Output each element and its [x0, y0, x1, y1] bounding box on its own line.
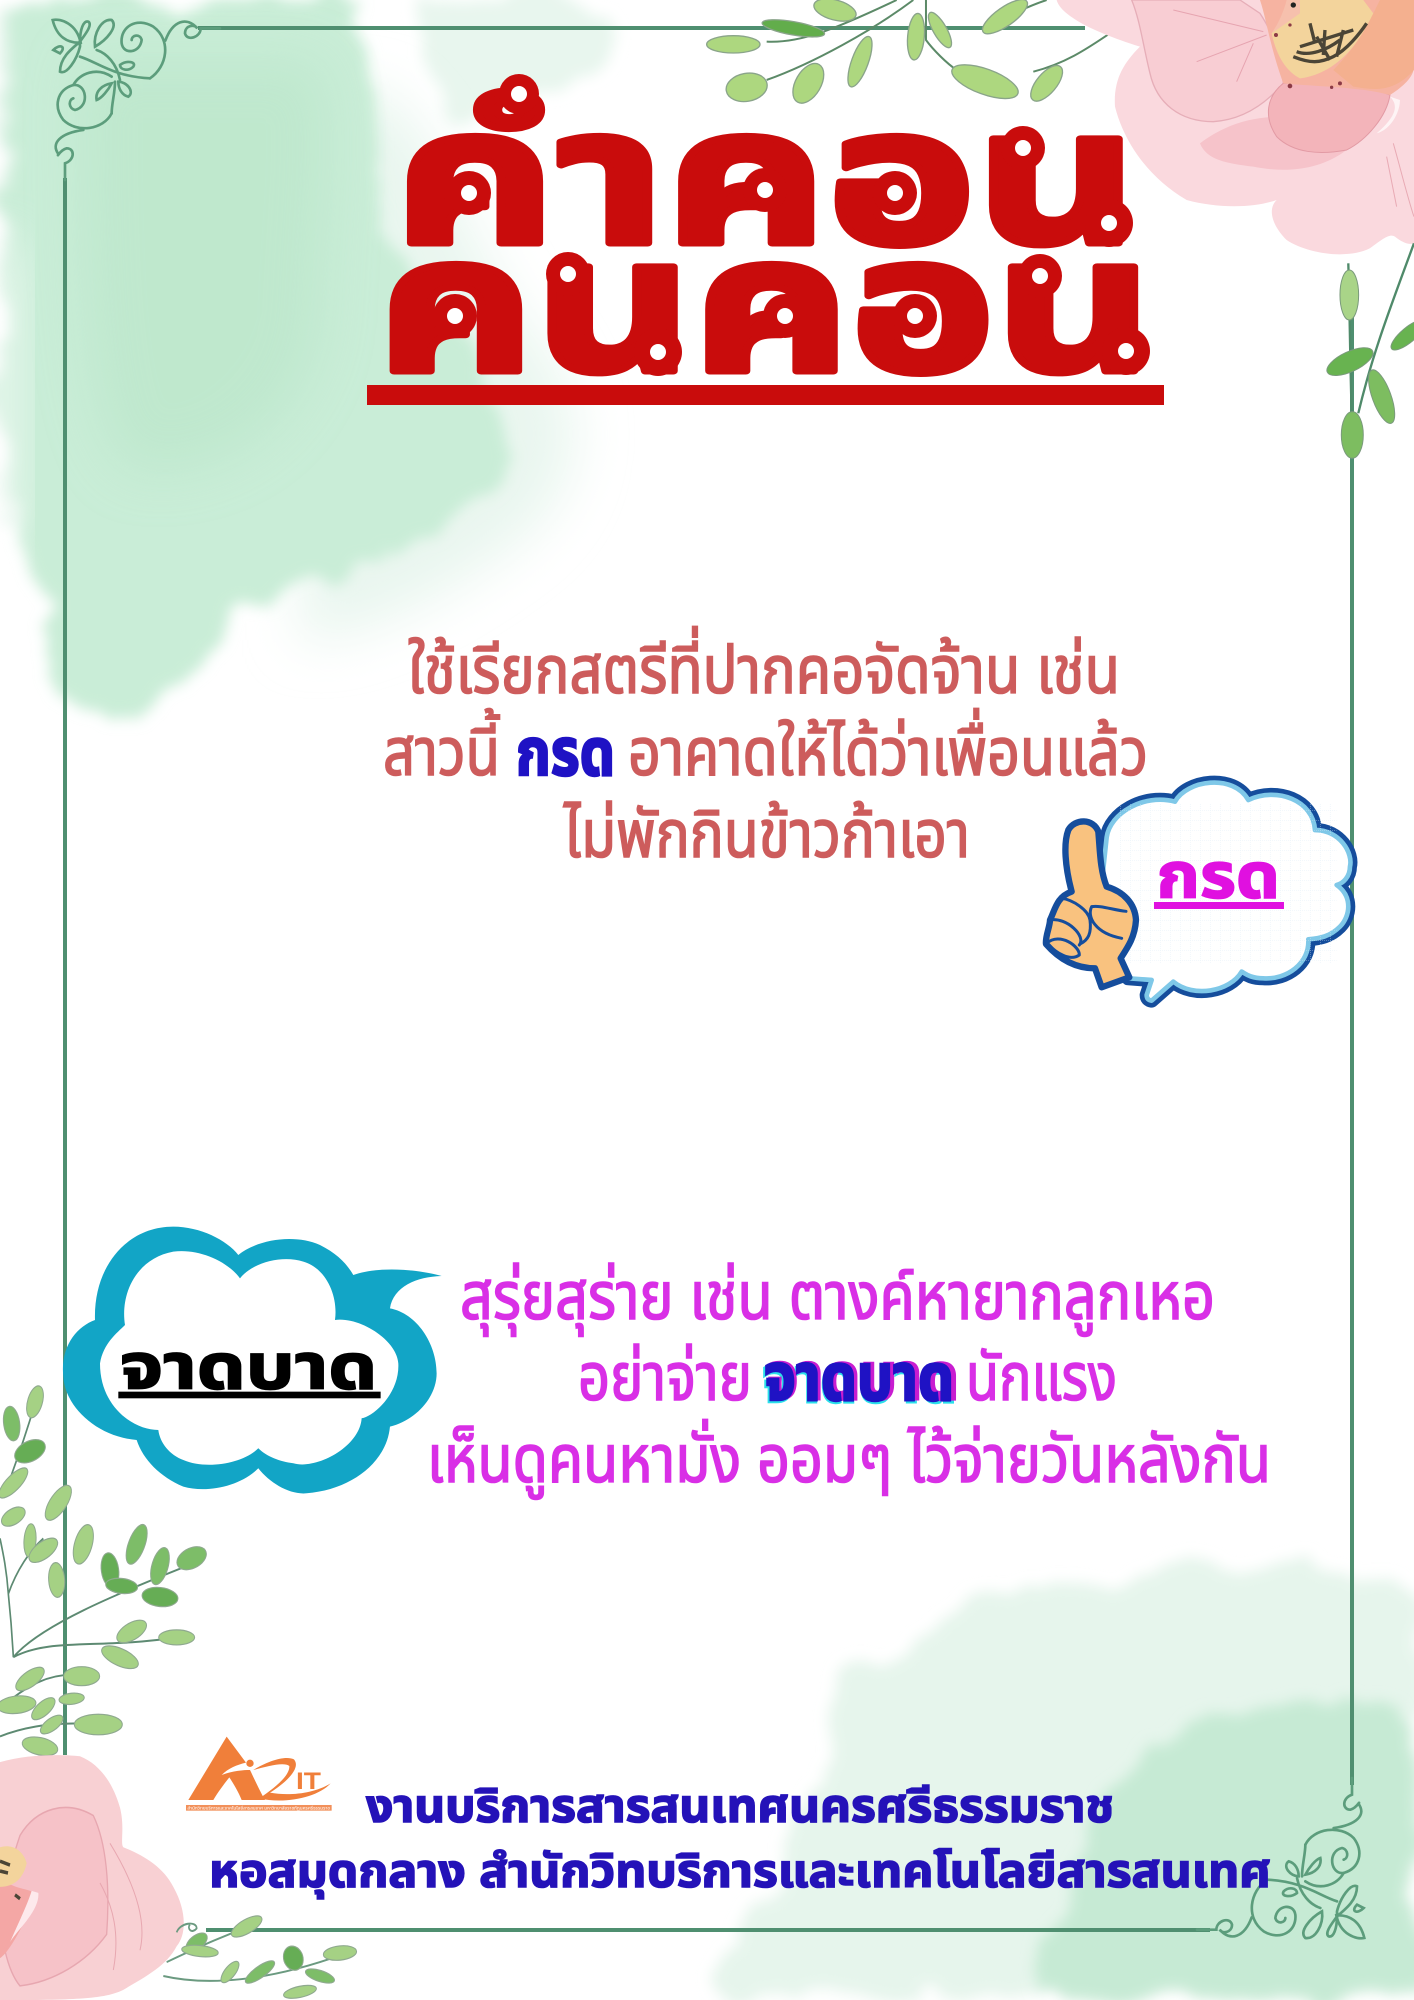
callout: กรด cloud with thumbs-up hand [1046, 783, 1350, 1001]
title underline [367, 385, 1164, 405]
background: green watercolor wash bottom-right [720, 1561, 1414, 1995]
logo: A2IT: สำนักวิทยบริการและเทคโนโลยีสารสนเทศ มหาวิทยาลัยราชภัฏนครศรีธรรมราช [187, 1804, 331, 1810]
ornament: bottom-right corner [1197, 1778, 1364, 1938]
highlighted word จาดบาด: จาดบาด [764, 1340, 954, 1414]
callout: จาดบาด cloud [63, 1227, 442, 1493]
text block: definition of กรด [383, 626, 1148, 871]
footer line 1: งานบริการสารสนเทศนครศรีธรรมราช [366, 1780, 1114, 1832]
cloud [1100, 783, 1350, 1001]
line 2 end: อาคาดให้ได้ว่าเพื่อนแล้ว [628, 708, 1148, 789]
line 1: ใช้เรียกสตรีที่ปากคอจัดจ้าน เช่น [408, 626, 1120, 707]
line 2 end: นักแรง [966, 1340, 1117, 1414]
footer text [209, 1780, 1271, 1899]
leaves: top branch [707, 0, 1110, 108]
title line 2: คนคอน [377, 200, 1153, 412]
flower: bottom-left [0, 1755, 184, 2000]
highlighted word จาดบาด: จาดบาด [766, 1339, 959, 1413]
line 2 start: อย่าจ่าย [578, 1340, 752, 1414]
leaves: bottom sprig [163, 1912, 357, 2000]
leaves: left branch [0, 1383, 209, 1759]
white cloud inner [100, 1251, 398, 1465]
leaves: right vine [1323, 243, 1414, 458]
line 1: สุรุ่ยสุร่าย เช่น ตางค์หายากลูกเหอ [460, 1259, 1215, 1337]
title letter loops [433, 74, 1150, 376]
line 2 start: สาวนี้ [383, 708, 500, 789]
title line 1: คำคอน [394, 72, 1138, 284]
footer line 2: หอสมุดกลาง สำนักวิทบริการและเทคโนโลยีสารสนเทศ [209, 1845, 1271, 1899]
highlighted word จาดบาด: จาดบาด [762, 1342, 957, 1416]
flower: top-right [1057, 0, 1414, 254]
title [367, 72, 1164, 412]
line 3: ไม่พักกินข้าวก้าเอา [563, 797, 970, 871]
teal cloud outer [63, 1227, 442, 1493]
hand [1046, 821, 1136, 987]
line 3: เห็นดูคนหามั่ง ออมๆ ไว้จ่ายวันหลังกัน [427, 1419, 1271, 1500]
cloud label กรด: กรด [1157, 841, 1280, 911]
logo: A2IT [186, 1737, 332, 1811]
highlighted word กรด: กรด [516, 715, 615, 789]
cloud label จาดบาด: จาดบาด [120, 1332, 377, 1402]
background: green watercolor wash top-left [0, 0, 623, 721]
text block: definition of จาดบาด [427, 1259, 1271, 1500]
ornament: top-left corner [53, 20, 220, 180]
logo: A2IT: IT [296, 1768, 321, 1795]
